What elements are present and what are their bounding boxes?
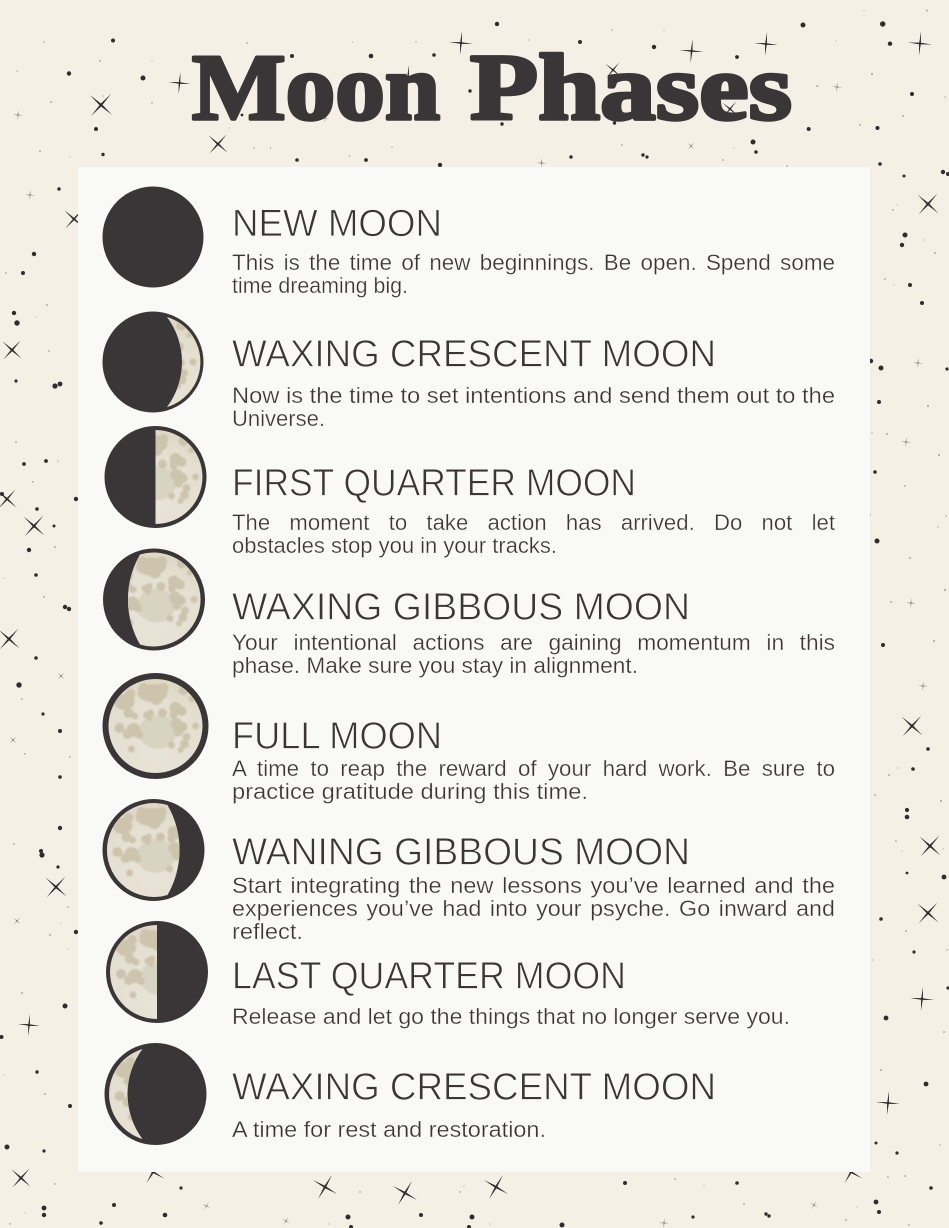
text: final crescent description: A time for rest and restoration. bbox=[232, 1117, 546, 1142]
phase: waxing crescent moon bbox=[97, 306, 835, 431]
text: first quarter description bbox=[232, 510, 835, 558]
phase: full moon bbox=[100, 670, 835, 804]
text: waxing gibbous description: phase. Make sure you stay in alignment. bbox=[232, 653, 638, 678]
text: waning gibbous description bbox=[232, 873, 835, 944]
text: waxing crescent description: Universe. bbox=[232, 406, 325, 431]
icon: full moon bbox=[102, 673, 208, 779]
text: new moon description: This is the time of new beginnings. Be open. Spend some bbox=[232, 250, 835, 275]
icon: new moon bbox=[102, 186, 204, 288]
icon: waxing crescent moon bbox=[102, 312, 204, 412]
main content panel bbox=[78, 167, 870, 1172]
heading: first quarter moon: FIRST QUARTER MOON bbox=[232, 462, 636, 504]
heading: waxing gibbous moon: WAXING GIBBOUS MOON bbox=[232, 586, 690, 628]
title: Phases bbox=[470, 36, 792, 140]
text: full moon description bbox=[232, 756, 835, 804]
phase: waxing gibbous moon bbox=[98, 544, 835, 678]
text: waning gibbous description: Start integrating the new lessons you’ve learned and the bbox=[232, 873, 835, 898]
text: first quarter description: The moment to take action has arrived. Do not let bbox=[232, 510, 835, 535]
heading: final crescent moon: WAXING CRESCENT MOON bbox=[232, 1066, 716, 1108]
text: waning gibbous description: reflect. bbox=[232, 919, 303, 944]
heading: waxing crescent moon: WAXING CRESCENT MOON bbox=[232, 334, 716, 376]
phase: waning gibbous moon bbox=[98, 794, 835, 944]
text: waxing crescent description: Now is the time to set intentions and send them out to the bbox=[232, 383, 835, 408]
title: Moon bbox=[192, 36, 440, 140]
text: waxing crescent description bbox=[232, 383, 835, 431]
icon: waning crescent moon bbox=[104, 1043, 206, 1145]
heading: full moon: FULL MOON bbox=[232, 716, 442, 758]
text: full moon description: A time to reap the reward of your hard work. Be sure to bbox=[232, 756, 835, 781]
text: new moon description: time dreaming big. bbox=[232, 273, 408, 298]
text: new moon description bbox=[232, 250, 835, 298]
text: last quarter description: Release and let go the things that no longer serve you. bbox=[232, 1004, 790, 1029]
heading: last quarter moon: LAST QUARTER MOON bbox=[232, 956, 626, 998]
heading: new moon: NEW MOON bbox=[232, 203, 442, 245]
phase: new moon bbox=[102, 186, 835, 298]
icon: waning gibbous moon bbox=[102, 799, 204, 901]
text: waxing gibbous description: Your intentional actions are gaining momentum in this bbox=[232, 630, 835, 655]
phase: first quarter moon bbox=[100, 421, 835, 558]
icon: first quarter moon bbox=[104, 426, 206, 528]
heading: waning gibbous moon: WANING GIBBOUS MOON bbox=[232, 832, 690, 874]
text: full moon description: practice gratitude during this time. bbox=[232, 779, 588, 804]
icon: last quarter moon bbox=[106, 921, 208, 1023]
text: waxing gibbous description bbox=[232, 630, 835, 678]
text: first quarter description: obstacles stop you in your tracks. bbox=[232, 533, 557, 558]
phase: last quarter moon bbox=[101, 916, 790, 1029]
icon: waxing gibbous moon bbox=[103, 548, 205, 650]
phase: waning crescent (labelled waxing crescent) moon bbox=[104, 1043, 713, 1145]
text: waning gibbous description: experiences you’ve had into your psyche. Go inward and bbox=[232, 896, 835, 921]
